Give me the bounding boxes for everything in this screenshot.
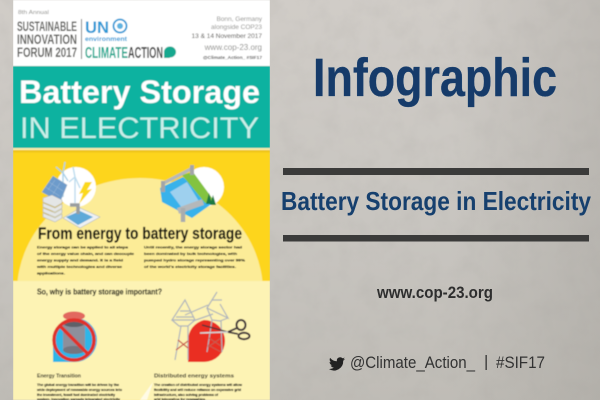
event details: @Climate_Action_ #SIF17	[203, 55, 262, 61]
heading: why important: So, why is battery storage important?	[37, 288, 162, 296]
text block: left intro	[36, 244, 135, 276]
bottom rule	[283, 235, 589, 242]
lightning bolt	[79, 182, 92, 204]
white circle: right illustration	[193, 166, 225, 207]
handle: @Climate_Action_	[350, 353, 475, 372]
text block: left intro: Energy storage can be applied to all steps	[37, 244, 129, 250]
pointer	[140, 382, 153, 400]
top rule	[283, 168, 589, 175]
hashtag: #SIF17	[496, 353, 545, 372]
text block: energy transition: the investment, fossil fuel dominated electricity	[37, 393, 115, 397]
Climate Action logo: ACTION	[128, 45, 163, 62]
text block: right intro: Until recently, the energy storage sector had	[144, 244, 243, 250]
UN environment logo	[85, 18, 128, 43]
pool	[63, 208, 100, 228]
text block: distributed energy systems: The creation of distributed energy systems will allow	[154, 383, 242, 387]
panel: pale yellow section	[13, 281, 270, 400]
Climate Action logo	[84, 46, 177, 59]
Climate Action logo: CLIMATE	[85, 45, 128, 62]
event name: FORUM 2017	[17, 44, 77, 60]
heading: From energy to battery storage: From energy to battery storage	[38, 225, 242, 243]
solar panel	[42, 176, 67, 202]
text block: distributed energy systems: infrastructure, also solving problems of	[154, 393, 219, 397]
text block: right intro: of the world's electricity storage facilities.	[144, 264, 236, 269]
event name: 8th Annual	[18, 10, 49, 16]
text block: right intro: been dominated by bulk technologies, with	[144, 251, 238, 256]
text block: distributed energy systems: flexibility and will reduce reliance on expensive grid	[154, 388, 241, 392]
white circle: left illustration	[56, 167, 96, 207]
text block: right intro	[144, 244, 246, 269]
text block: distributed energy systems	[154, 374, 242, 400]
website: www.cop-23.org	[376, 284, 493, 302]
text block: distributed energy systems: Distributed energy systems	[154, 374, 234, 380]
right pylon	[185, 292, 228, 352]
social line	[329, 353, 545, 372]
battery stack	[43, 195, 62, 222]
text block: energy transition: Energy Transition	[37, 374, 81, 380]
event name: SUSTAINABLE	[17, 18, 77, 34]
text block: right intro: pumped hydro storage representing over 99%	[144, 258, 246, 262]
event details: 13 & 14 November 2017	[192, 33, 262, 40]
title: Infographic	[313, 48, 557, 108]
icon: bird	[329, 357, 345, 370]
event name: INNOVATION	[17, 31, 77, 47]
event details: alongside COP23	[211, 24, 262, 31]
panel: yellow section	[13, 148, 270, 400]
text block: left intro: of the energy value chain, and can decouple	[37, 251, 135, 256]
panel: white event header	[13, 0, 270, 66]
UN environment logo: UN	[85, 18, 109, 37]
UN environment logo: environment	[85, 36, 128, 43]
pale yellow dome	[17, 178, 263, 400]
text block: energy transition: The global energy transition will be driven by the	[37, 383, 119, 387]
text block: left intro: energy supply and demand. It is a field	[37, 258, 124, 262]
event details	[192, 16, 263, 61]
icon: hydro dam	[160, 165, 216, 222]
separator	[486, 355, 487, 370]
event name	[17, 10, 77, 60]
heading: in electricity: IN ELECTRICITY	[20, 112, 259, 145]
left pylon	[172, 300, 195, 360]
text block: energy transition: wide deployment of renewable energy sources into	[36, 388, 122, 392]
panel: infographic preview	[13, 0, 270, 400]
scissors	[200, 325, 228, 333]
text block: left intro: with multiple technologies and diverse	[36, 264, 123, 269]
red circle	[188, 320, 225, 362]
icon: renewable energy	[42, 162, 100, 228]
divider	[81, 19, 82, 59]
icon: crossed out fossil fuel barrel	[53, 312, 97, 362]
text block: energy transition	[36, 374, 122, 400]
icon: power pylons and scissors	[172, 292, 250, 362]
turbines	[56, 162, 80, 203]
event details: www.cop-23.org	[204, 43, 262, 52]
text block: left intro: applications.	[37, 270, 65, 276]
panel: teal title banner	[13, 66, 270, 148]
heading: Battery Storage: Battery Storage	[19, 74, 260, 110]
event details: Bonn, Germany	[216, 16, 263, 23]
